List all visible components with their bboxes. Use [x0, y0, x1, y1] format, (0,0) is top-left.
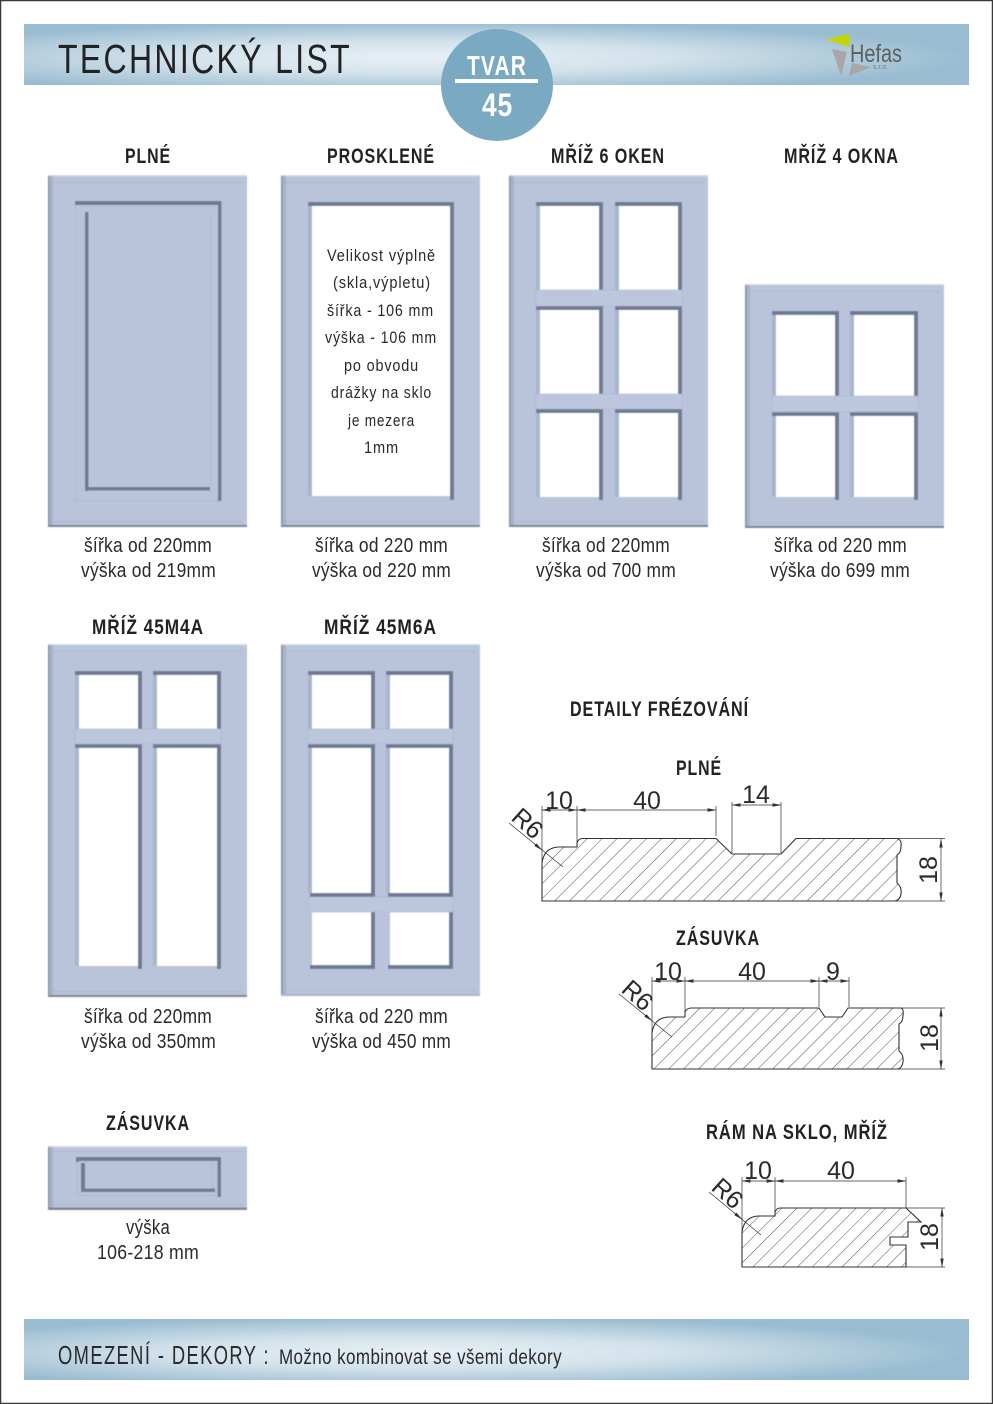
caption: mříž 6 oken — [536, 534, 676, 582]
profile drawing: zásuvka: 9 — [826, 958, 840, 986]
heading: mříž 6 oken: MŘÍŽ 6 OKEN — [551, 144, 665, 168]
caption: mříž 6 oken: výška od 700 mm — [536, 559, 676, 582]
door: zásuvka — [48, 1146, 247, 1210]
profile drawing: plné — [506, 781, 945, 901]
footer label: OMEZENÍ - DEKORY : — [58, 1340, 270, 1370]
glass size note: po obvodu — [344, 356, 419, 375]
glass size note: šířka - 106 mm — [327, 301, 434, 320]
profile drawing: plné: 40 — [633, 787, 661, 815]
glass size note: 1mm — [364, 438, 399, 457]
heading: detaily frézování: DETAILY FRÉZOVÁNÍ — [570, 698, 749, 721]
logo: Hefas: Hefas — [850, 40, 902, 68]
profile drawing: zásuvka: 40 — [738, 958, 766, 986]
caption: mříž 45M4A — [81, 1005, 216, 1053]
profile drawing: rám na sklo — [706, 1157, 945, 1267]
glass size note: výška - 106 mm — [325, 328, 437, 347]
heading: profil rám na sklo, mříž: RÁM NA SKLO, MŘÍŽ — [706, 1120, 888, 1144]
profile drawing: plné: 10 — [545, 787, 573, 815]
heading: mříž 45M4A: MŘÍŽ 45M4A — [92, 615, 204, 639]
caption: mříž 45M4A: šířka od 220mm — [84, 1005, 212, 1028]
logo: Hefas — [826, 34, 902, 76]
caption: zásuvka — [97, 1216, 199, 1264]
glass size note: drážky na sklo — [331, 383, 432, 402]
door: prosklené — [281, 175, 480, 527]
caption: mříž 45M6A — [312, 1005, 451, 1053]
glass size note: Velikost výplně — [327, 246, 436, 265]
profile drawing: plné: 14 — [742, 781, 770, 809]
profile drawing: rám na sklo: 10 — [744, 1157, 772, 1185]
caption: mříž 45M6A: výška od 450 mm — [312, 1030, 451, 1053]
profile drawing: rám na sklo: 18 — [916, 1223, 944, 1251]
door: mříž 6 oken — [509, 175, 708, 527]
profile drawing: rám na sklo: R6 — [706, 1173, 748, 1215]
caption: mříž 4 okna: výška do 699 mm — [770, 559, 910, 582]
heading: plné: PLNÉ — [125, 145, 171, 168]
door: mříž 45M6A — [281, 644, 480, 996]
heading: mříž 45M6A: MŘÍŽ 45M6A — [324, 615, 437, 639]
profile drawing: plné: 18 — [915, 856, 943, 884]
footer note: Možno kombinovat se všemi dekory — [279, 1346, 562, 1369]
caption: plné — [81, 534, 216, 582]
door: mříž 45M4A — [48, 644, 247, 997]
caption: prosklené: výška od 220 mm — [312, 559, 451, 582]
profile drawing: zásuvka — [616, 958, 945, 1069]
caption: plné: šířka od 220mm — [84, 534, 212, 557]
profile drawing: plné: R6 — [506, 803, 548, 845]
caption: mříž 45M4A: výška od 350mm — [81, 1030, 216, 1053]
heading: prosklené: PROSKLENÉ — [327, 145, 435, 168]
header band — [24, 24, 969, 85]
badge: tvar 45: TVAR — [467, 50, 527, 81]
heading: zásuvka: ZÁSUVKA — [106, 1112, 190, 1135]
profile drawing: rám na sklo: 40 — [827, 1157, 855, 1185]
badge: tvar 45: 45 — [482, 87, 513, 123]
door: plné — [48, 175, 247, 527]
caption: plné: výška od 219mm — [81, 559, 216, 582]
door: mříž 4 okna — [745, 284, 944, 528]
caption: zásuvka: výška — [126, 1216, 170, 1239]
glass size note: je mezera — [347, 411, 415, 430]
heading: profil zásuvka: ZÁSUVKA — [676, 927, 760, 950]
glass size note — [325, 246, 437, 457]
heading: mříž 4 okna: MŘÍŽ 4 OKNA — [784, 144, 899, 168]
caption: mříž 4 okna: šířka od 220 mm — [774, 534, 907, 557]
logo: Hefas: s.r.o. — [873, 64, 888, 71]
caption: prosklené — [312, 534, 451, 582]
caption: zásuvka: 106-218 mm — [97, 1241, 199, 1264]
profile drawing: zásuvka: 10 — [654, 958, 682, 986]
caption: prosklené: šířka od 220 mm — [315, 534, 448, 557]
caption: mříž 4 okna — [770, 534, 910, 582]
caption: mříž 45M6A: šířka od 220 mm — [315, 1005, 448, 1028]
badge: tvar 45 — [441, 29, 553, 141]
title: TECHNICKÝ LIST — [58, 36, 352, 82]
profile drawing: zásuvka: 18 — [916, 1024, 944, 1052]
footer band — [24, 1319, 969, 1380]
caption: mříž 6 oken: šířka od 220mm — [542, 534, 670, 557]
profile drawing: zásuvka: R6 — [616, 975, 658, 1017]
heading: profil plné: PLNÉ — [676, 757, 722, 780]
glass size note: (skla,výpletu) — [333, 273, 431, 292]
